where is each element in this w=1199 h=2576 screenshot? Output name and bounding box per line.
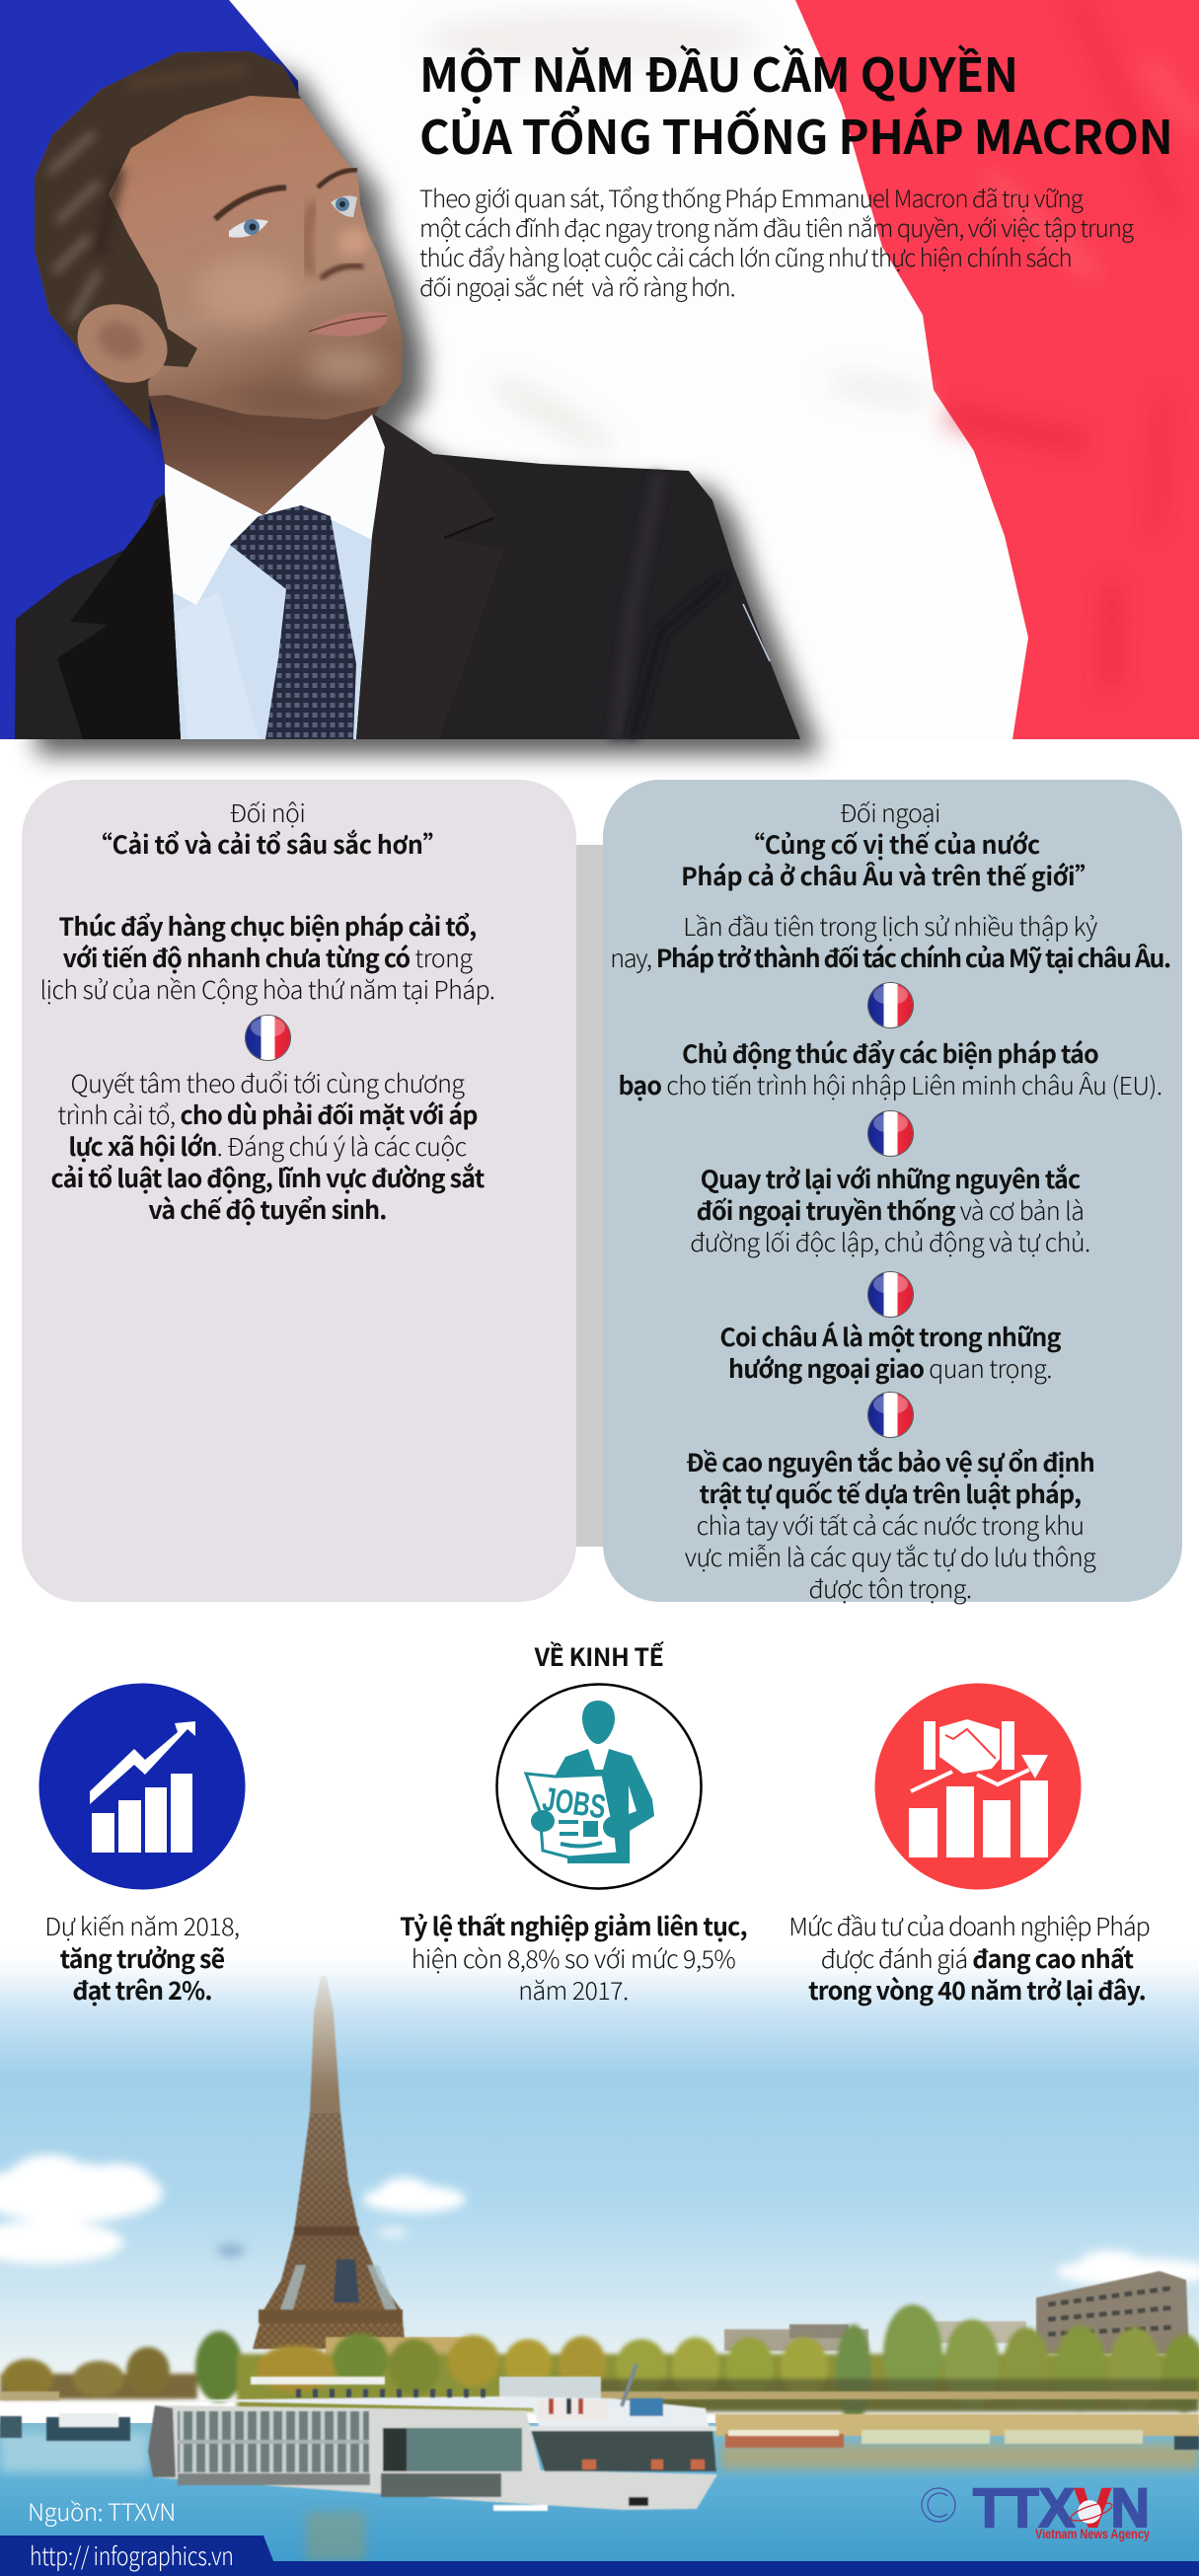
panel heading: Đối ngoại: “Củng cố vị thế của nước bbox=[740, 826, 1040, 862]
icon: French flag bbox=[868, 1111, 913, 1156]
intro text: thúc đẩy hàng loạt cuộc cải cách lớn cũng như thực hiện chính sách bbox=[419, 239, 1072, 273]
icon: French flag bbox=[868, 1393, 913, 1437]
text: traditional principles: đường lối độc lập, chủ động và tự chủ. bbox=[690, 1224, 1090, 1259]
title bbox=[419, 38, 1172, 168]
text: traditional principles: Quay trở lại với những nguyên tắc bbox=[701, 1161, 1080, 1196]
eyes and brows bbox=[215, 170, 357, 238]
icon: French flag bbox=[868, 983, 913, 1027]
text: reform determination bbox=[51, 1065, 485, 1227]
text: Asia: hướng ngoại giao quan trọng. bbox=[728, 1350, 1052, 1386]
Eiffel tower bbox=[253, 1976, 406, 2349]
panel heading: Đối ngoại bbox=[681, 795, 1099, 893]
text: EU integration bbox=[618, 1035, 1162, 1102]
text: Asia bbox=[719, 1319, 1061, 1386]
panel: domestic policy bbox=[22, 780, 576, 1602]
bottom photo: Paris sky bbox=[0, 1949, 1199, 2374]
panel heading: Đối nội bbox=[88, 795, 447, 862]
text: traditional principles bbox=[690, 1161, 1090, 1259]
text: investment: Mức đầu tư của doanh nghiệp Pháp bbox=[788, 1908, 1150, 1943]
shirt bbox=[165, 415, 385, 739]
text: traditional principles: đối ngoại truyền thống và cơ bản là bbox=[697, 1192, 1084, 1228]
text: reform measures: Thúc đẩy hàng chục biện pháp cải tổ, bbox=[59, 908, 476, 944]
text: EU integration: Chủ động thúc đẩy các biện pháp táo bbox=[682, 1035, 1098, 1071]
text: partner of the US: Lần đầu tiên trong lịch sử nhiều thập kỷ bbox=[683, 908, 1097, 944]
cruise ship bbox=[148, 2364, 717, 2511]
text: investment: trong vòng 40 năm trở lại đây. bbox=[808, 1972, 1146, 2008]
text: international order: vực miễn là các quy tắc tự do lưu thông bbox=[685, 1539, 1095, 1574]
hero background: French flag bbox=[0, 0, 1199, 739]
icon: jobs newspaper bbox=[497, 1684, 701, 1889]
text: international order: chìa tay với tất cả các nước trong khu bbox=[697, 1507, 1084, 1543]
text: growth: đạt trên 2%. bbox=[72, 1972, 212, 2008]
panel: foreign policy bbox=[603, 780, 1182, 1602]
portrait shadow bbox=[37, 67, 822, 755]
collar bbox=[165, 415, 385, 605]
text: reform determination: và chế độ tuyển sinh. bbox=[148, 1191, 387, 1227]
neck bbox=[138, 365, 400, 515]
text: partner of the US: nay, Pháp trở thành đối tác chính của Mỹ tại châu Âu. bbox=[610, 940, 1170, 975]
text: growth: tăng trưởng sẽ bbox=[60, 1940, 224, 1976]
title: CỦA TỔNG THỐNG PHÁP MACRON bbox=[419, 100, 1172, 168]
intro text bbox=[419, 180, 1134, 303]
tie bbox=[230, 505, 356, 739]
source: Nguồn: TTXVN bbox=[28, 2493, 176, 2528]
text: reform determination: trình cải tổ, cho dù phải đối mặt với áp bbox=[57, 1097, 478, 1132]
panel heading: Đối ngoại: Đối ngoại bbox=[840, 795, 940, 830]
text: international order: trật tự quốc tế dựa trên luật pháp, bbox=[700, 1476, 1081, 1511]
text: international order: Đề cao nguyên tắc bảo vệ sự ổn định bbox=[686, 1444, 1094, 1479]
text: investment: được đánh giá đang cao nhất bbox=[821, 1940, 1133, 1976]
nose and mouth bbox=[309, 228, 387, 336]
text: growth: Dự kiến năm 2018, bbox=[44, 1908, 240, 1943]
intro text: Theo giới quan sát, Tổng thống Pháp Emmanuel Macron đã trụ vững bbox=[419, 180, 1083, 214]
connector between panels bbox=[572, 845, 607, 1547]
text: EU integration: bạo cho tiến trình hội nhập Liên minh châu Âu (EU). bbox=[618, 1067, 1162, 1102]
lapels bbox=[356, 415, 503, 739]
trees and buildings bbox=[0, 2271, 1199, 2450]
text: partner of the US bbox=[610, 908, 1170, 975]
logo: TTXVN: TTXVN bbox=[973, 2476, 1150, 2538]
text: reform determination: lực xã hội lớn. Đáng chú ý là các cuộc bbox=[68, 1128, 467, 1164]
hair bbox=[35, 51, 301, 431]
clouds bbox=[0, 2155, 1199, 2286]
text: reform measures: lịch sử của nền Cộng hòa thứ năm tại Pháp. bbox=[40, 971, 494, 1007]
icon: jobs newspaper: JOBS bbox=[540, 1780, 608, 1827]
text: international order bbox=[685, 1444, 1095, 1606]
icon: growth chart bbox=[39, 1684, 245, 1889]
title: MỘT NĂM ĐẦU CẦM QUYỀN bbox=[419, 38, 1018, 106]
footer bar bbox=[0, 2536, 1199, 2576]
text: unemployment: Tỷ lệ thất nghiệp giảm liên tục, bbox=[400, 1908, 747, 1943]
intro text: đối ngoại sắc nét và rõ ràng hơn. bbox=[419, 268, 735, 303]
text: reform measures bbox=[40, 908, 494, 1007]
intro text: một cách đĩnh đạc ngay trong năm đầu tiên nắm quyền, với việc tập trung bbox=[419, 209, 1133, 244]
text: unemployment: năm 2017. bbox=[518, 1972, 629, 2008]
icon: French flag bbox=[246, 1016, 290, 1060]
text: unemployment: hiện còn 8,8% so với mức 9,5% bbox=[412, 1940, 735, 1976]
icon: investment handshake bbox=[874, 1684, 1082, 1889]
text: reform determination: Quyết tâm theo đuổi tới cùng chương bbox=[71, 1065, 464, 1100]
text: unemployment bbox=[400, 1908, 747, 2008]
heading: economy: VỀ KINH TẾ bbox=[535, 1638, 663, 1674]
text: reform measures: với tiến độ nhanh chưa từng có trong bbox=[63, 940, 472, 975]
head bbox=[35, 51, 403, 419]
text: Asia: Coi châu Á là một trong những bbox=[719, 1319, 1061, 1354]
website link: http:// infographics.vn bbox=[30, 2538, 234, 2573]
panel heading: Đối nội: “Cải tổ và cải tổ sâu sắc hơn” bbox=[88, 826, 447, 862]
text: growth bbox=[44, 1908, 240, 2008]
icon: French flag bbox=[868, 1272, 913, 1317]
logo: TTXVN: Vietnam News Agency bbox=[1035, 2526, 1150, 2541]
portrait: Emmanuel Macron bbox=[15, 51, 822, 755]
panel heading: Đối nội: Đối nội bbox=[230, 795, 305, 830]
jacket bbox=[15, 415, 800, 739]
text: reform determination: cải tổ luật lao động, lĩnh vực đường sắt bbox=[51, 1160, 484, 1195]
river bbox=[0, 2423, 1199, 2566]
ear bbox=[64, 290, 181, 397]
panel heading: Đối ngoại: Pháp cả ở châu Âu và trên thế giới” bbox=[681, 858, 1099, 893]
text: international order: được tôn trọng. bbox=[808, 1570, 972, 1606]
text: investment bbox=[788, 1908, 1150, 2008]
